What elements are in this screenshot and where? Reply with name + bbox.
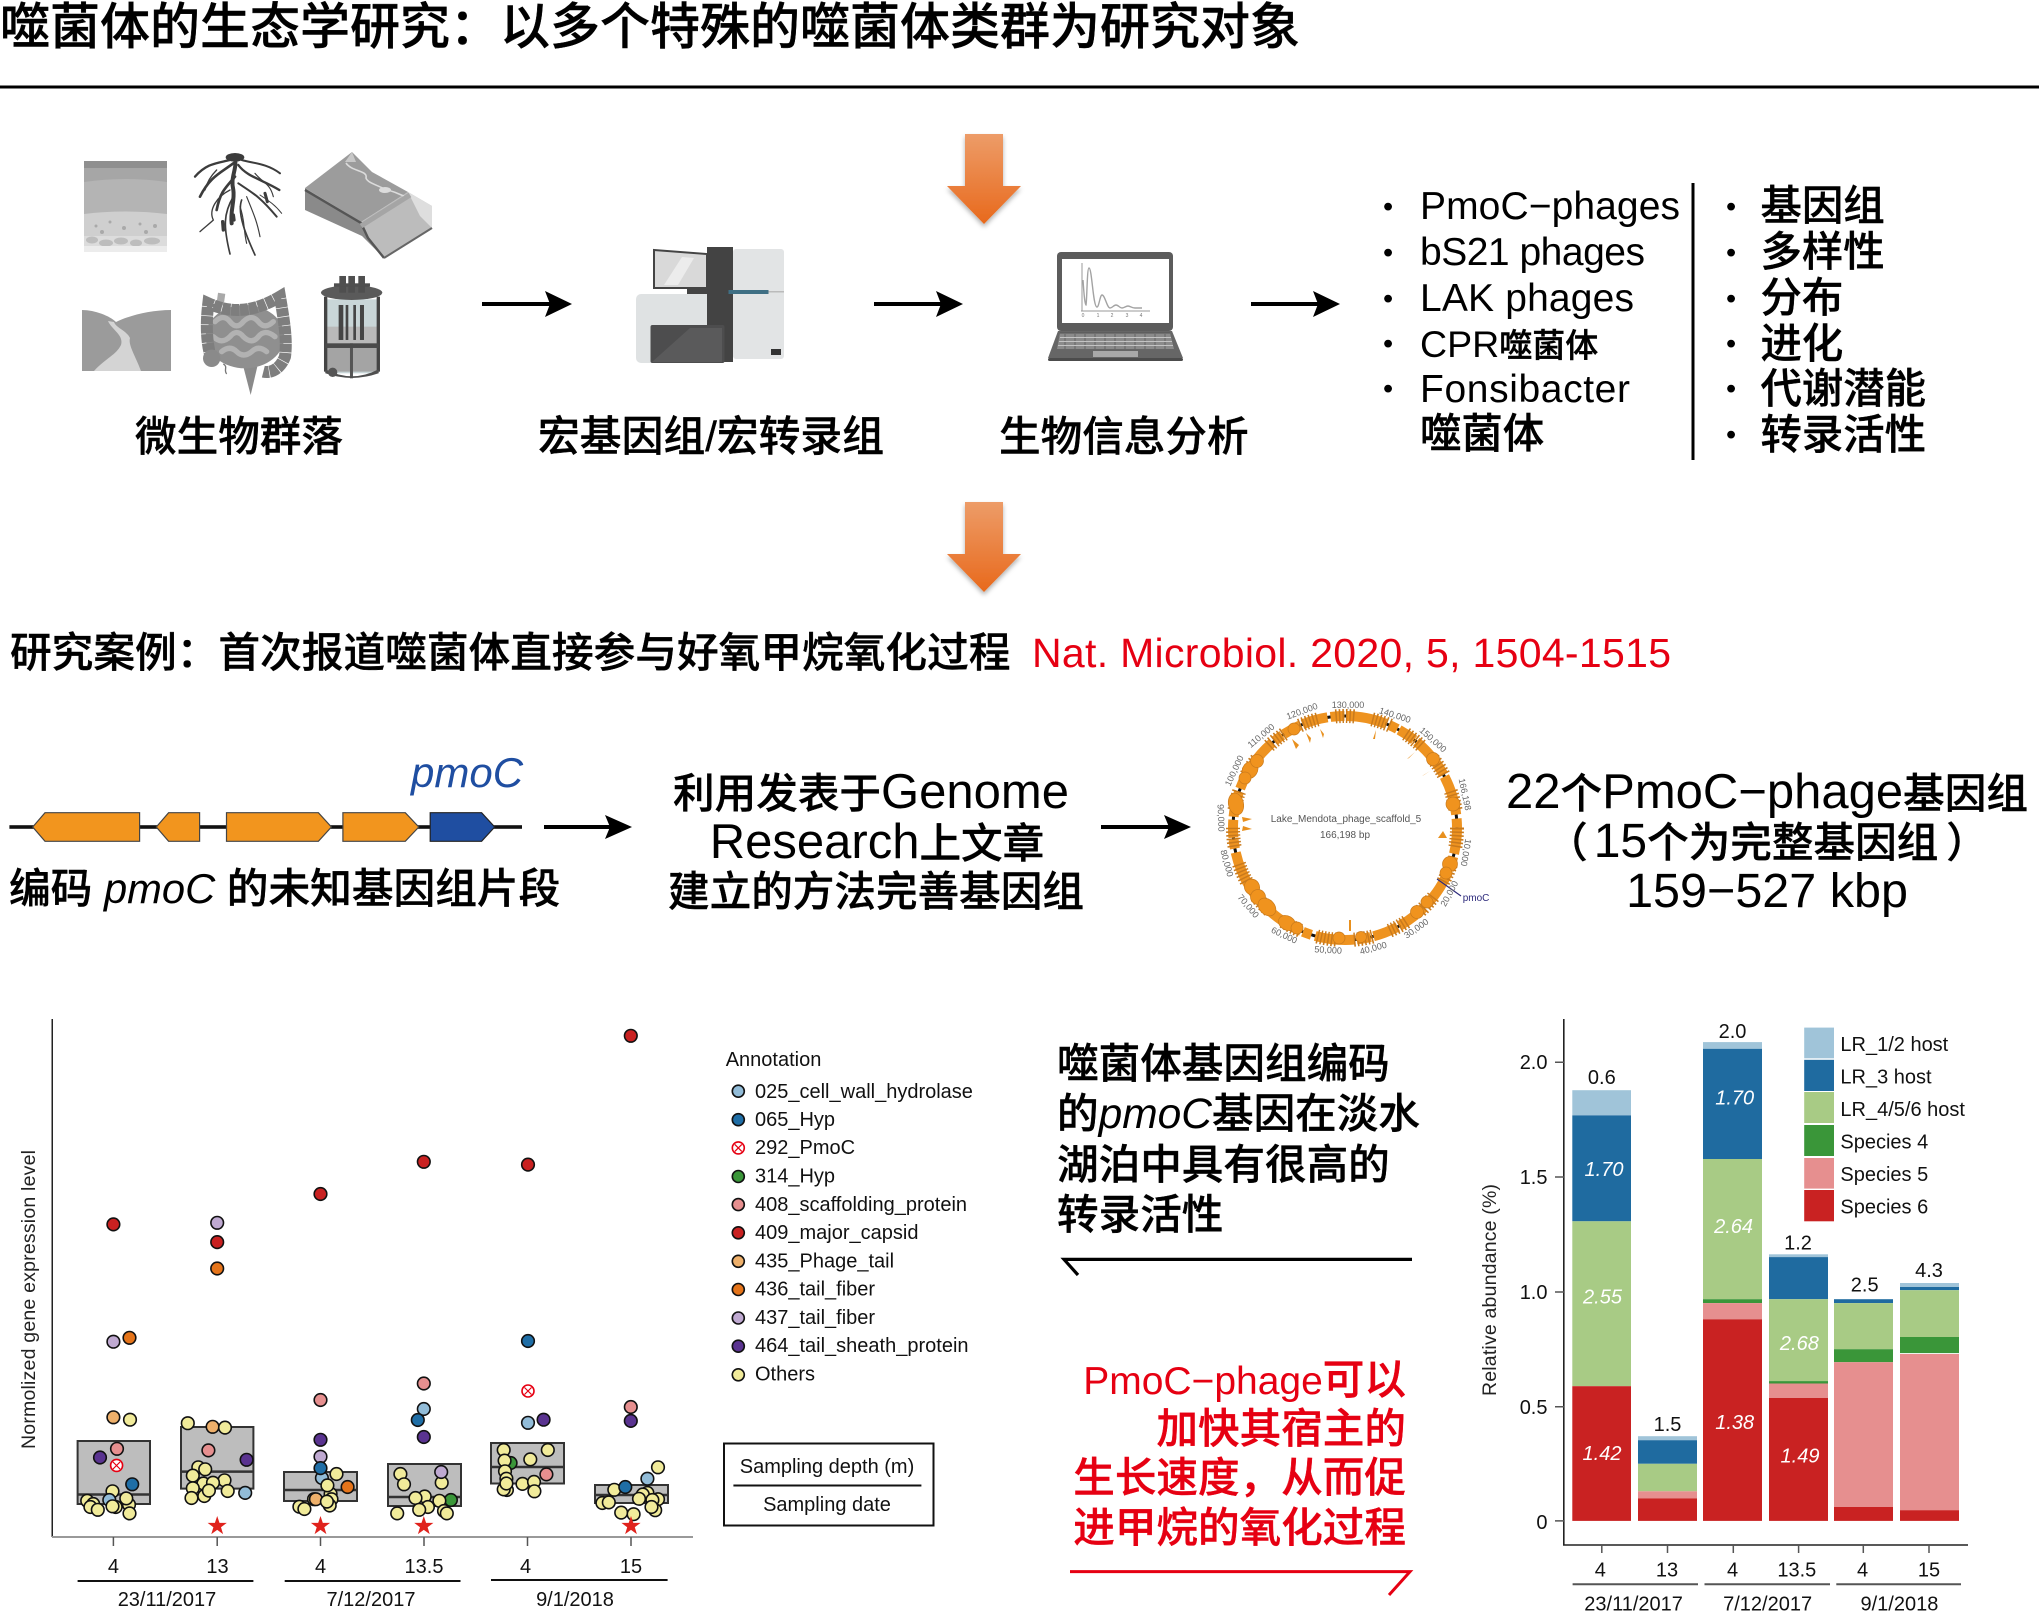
callout: growth effect: 加快其宿主的: [1156, 1405, 1406, 1452]
bar 3: [1703, 1042, 1762, 1521]
arrow: black left: [1064, 1259, 1412, 1275]
bar 1: [1572, 1090, 1631, 1521]
legend: annotation: 025_cell_wall_hydrolase: [755, 1081, 973, 1103]
caption: metagenome: 宏基因组/宏转录组: [538, 413, 884, 460]
list: study aspects: •: [1726, 419, 1736, 451]
callout: transcription activity: 的pmoC基因在淡水: [1057, 1090, 1420, 1138]
genome map labels: 40,000: [1359, 940, 1388, 956]
genome map labels: 100,000: [1223, 754, 1246, 788]
genome map labels: pmoC: [1463, 893, 1489, 904]
genome map labels: 80,000: [1219, 849, 1235, 878]
genome map labels: 150,000: [1418, 725, 1448, 754]
arrow: to sequencing: [482, 291, 572, 317]
data points: 13 m, 23/11/2017: [182, 1216, 253, 1504]
legend: hosts: Species 6: [1840, 1196, 1928, 1218]
genome map labels: 50,000: [1314, 944, 1342, 956]
icon: laptop: 2: [1111, 313, 1114, 319]
data points: 4 m, 23/11/2017: [81, 1218, 138, 1520]
list: study aspects: •: [1726, 373, 1736, 405]
text: PmoC-phage genomes: [1506, 765, 2028, 918]
y tick labels: 1.0: [1520, 1282, 1548, 1304]
x axis labels: 13: [1656, 1560, 1678, 1582]
x axis labels: 4: [1595, 1560, 1606, 1582]
arrow: fragment to method: [544, 815, 632, 839]
list: phage groups: •: [1383, 373, 1393, 405]
genome map labels: 30,000: [1402, 917, 1430, 941]
x axis labels: 15: [1918, 1560, 1940, 1582]
bar top labels: [1588, 1021, 1943, 1436]
y tick labels: 0: [1536, 1512, 1548, 1534]
genome map labels: 130,000: [1332, 700, 1364, 710]
legend: annotation: 408_scaffolding_protein: [755, 1194, 967, 1216]
title: 噬菌体的生态学研究：以多个特殊的噬菌体类群为研究对象: [0, 0, 1300, 55]
bar 6: [1900, 1283, 1959, 1521]
y tick labels: [1520, 1052, 1548, 1534]
text: method: [668, 765, 1084, 915]
axes: [1555, 1019, 1968, 1553]
chart: relative abundance: [1479, 1019, 1968, 1616]
legend: annotation: Others: [755, 1364, 815, 1386]
x axis labels: 15: [620, 1556, 642, 1578]
legend: hosts: [1804, 1028, 1965, 1221]
list: study aspects: 代谢潜能: [1760, 366, 1926, 412]
icon: river valley: [82, 310, 171, 371]
list: phage groups: Fonsibacter: [1420, 368, 1630, 411]
list: phage groups: CPR噬菌体: [1420, 323, 1598, 365]
arrow: to bioinformatics: [874, 291, 963, 317]
legend: annotation: 437_tail_fiber: [755, 1307, 875, 1329]
bar value labels: 2.55: [1582, 1286, 1623, 1308]
legend: annotation: 314_Hyp: [755, 1166, 835, 1188]
legend: annotation: [726, 1049, 973, 1386]
x axis labels: 4: [108, 1556, 119, 1578]
bar 5: [1834, 1299, 1893, 1521]
bar value labels: 1.70: [1585, 1159, 1623, 1181]
list: phage groups: bS21 phages: [1420, 231, 1645, 274]
bar 4: [1769, 1254, 1828, 1521]
callout: growth effect: PmoC−phage可以: [1083, 1356, 1406, 1403]
icon: bioreactor: [321, 276, 382, 378]
genome map labels: Lake_Mendota_phage_scaffold_5: [1271, 814, 1422, 825]
y tick labels: 1.5: [1520, 1167, 1548, 1189]
caption: bioinformatics: 生物信息分析: [999, 413, 1249, 460]
text: PmoC-phage genomes: 159−527 kbp: [1626, 864, 1908, 918]
genome map labels: 120,000: [1285, 701, 1319, 721]
list: phage groups: •: [1383, 328, 1393, 360]
legend: sampling key: Sampling date: [763, 1494, 891, 1516]
list: study aspects: •: [1726, 237, 1736, 269]
icon: laptop: 4: [1140, 313, 1143, 319]
bar value labels: 1.70: [1715, 1088, 1754, 1110]
x axis labels: 13.5: [1777, 1560, 1816, 1582]
icon: sequencer: [636, 247, 784, 363]
genome map labels: 166,198 bp: [1320, 830, 1370, 841]
icon: laptop: [1048, 252, 1183, 361]
genome map labels: 140,000: [1378, 705, 1412, 725]
x axis labels: 7/12/2017: [327, 1589, 415, 1611]
panel: microbial communities icons: [82, 152, 432, 395]
list: phage groups: [1383, 185, 1680, 457]
heading: case study: 研究案例：首次报道噬菌体直接参与好氧甲烷氧化过程: [10, 629, 1010, 676]
x axis labels: 23/11/2017: [1584, 1594, 1683, 1616]
circular genome map: [1216, 700, 1489, 956]
list: phage groups: PmoC−phages: [1420, 185, 1680, 228]
legend: sampling key: Sampling depth (m): [740, 1456, 914, 1478]
icon: landscape block: [305, 152, 432, 258]
x axis labels: 13.5: [405, 1556, 443, 1578]
genome map labels: 110,000: [1246, 722, 1276, 750]
bar value labels: 2.68: [1779, 1333, 1819, 1355]
list: phage groups: 噬菌体: [1420, 411, 1544, 457]
legend: annotation: 409_major_capsid: [755, 1222, 918, 1244]
genome map labels: 70,000: [1236, 892, 1261, 920]
x axis labels: 4: [520, 1556, 531, 1578]
text: PmoC-phage genomes: 22个PmoC−phage基因组: [1506, 765, 2028, 819]
bar top labels: 2.0: [1719, 1021, 1746, 1043]
icon: intestine: [203, 293, 286, 395]
label: pmoC: pmoC: [409, 749, 524, 796]
x axis labels: 7/12/2017: [1723, 1594, 1812, 1616]
significance stars: [208, 1516, 641, 1534]
bar value labels: 1.49: [1781, 1446, 1819, 1468]
text: method: Research上文章: [710, 815, 1044, 869]
list: study aspects: •: [1726, 328, 1736, 360]
legend: annotation: 464_tail_sheath_protein: [755, 1335, 969, 1357]
legend: hosts: Species 5: [1840, 1164, 1928, 1186]
bar top labels: 0.6: [1588, 1067, 1616, 1089]
axes: [52, 1019, 693, 1546]
data points: 13.5 m, 7/12/2017: [391, 1156, 457, 1520]
x axis labels: [78, 1556, 668, 1611]
x axis labels: 9/1/2018: [1860, 1594, 1938, 1616]
arrow: method to genome map: [1101, 815, 1191, 839]
list: study aspects: 进化: [1760, 321, 1843, 367]
bar top labels: 2.5: [1851, 1274, 1879, 1296]
bar value labels: 2.64: [1713, 1216, 1753, 1238]
x axis labels: 4: [315, 1556, 326, 1578]
icon: laptop: 0: [1082, 313, 1085, 319]
icon: plant roots: [195, 153, 282, 255]
callout: growth effect: 生长速度，从而促: [1073, 1454, 1406, 1501]
data points: 15 m, 9/1/2018: [596, 1030, 664, 1520]
bar top labels: 4.3: [1915, 1260, 1943, 1282]
list: study aspects: •: [1726, 283, 1736, 315]
text: method: 建立的方法完善基因组: [668, 868, 1084, 915]
arrow: bottom orange: [947, 502, 1021, 592]
list: study aspects: 基因组: [1760, 183, 1885, 229]
boxplots: [78, 1427, 668, 1506]
genome map labels: 20,000: [1438, 879, 1460, 908]
legend: hosts: LR_1/2 host: [1840, 1034, 1949, 1056]
bar top labels: 1.5: [1654, 1414, 1681, 1436]
text: method: 利用发表于Genome: [673, 765, 1069, 819]
chart: gene expression: [18, 1019, 693, 1611]
genome map labels: 10,000: [1459, 838, 1473, 867]
genome map labels: 60,000: [1270, 925, 1299, 946]
data points: 4 m, 9/1/2018: [497, 1158, 554, 1498]
icon: laptop: 1: [1097, 313, 1100, 319]
y tick labels: 0.5: [1520, 1397, 1548, 1419]
list: phage groups: LAK phages: [1420, 277, 1634, 320]
y axis label: Relative abundance (%): [1479, 1184, 1501, 1396]
x axis labels: [1573, 1560, 1961, 1616]
caption: unknown fragment: 编码 pmoC 的未知基因组片段: [9, 865, 560, 912]
x axis labels: 4: [1857, 1560, 1868, 1582]
arrow: top orange: [947, 134, 1021, 224]
citation: Nat. Microbiol. 2020, 5, 1504-1515: [1032, 630, 1671, 676]
bar value labels: [1582, 1088, 1819, 1468]
icon: soil profile: [84, 161, 167, 252]
y tick labels: 2.0: [1520, 1052, 1548, 1074]
arrow: to phage lists: [1251, 291, 1340, 317]
legend: annotation: 292_PmoC: [755, 1137, 855, 1159]
bar value labels: 1.38: [1715, 1412, 1754, 1434]
callout: transcription activity: 噬菌体基因组编码: [1057, 1040, 1390, 1087]
genome map labels: 166,198: [1457, 777, 1473, 811]
legend: annotation: 436_tail_fiber: [755, 1278, 875, 1300]
bar value labels: 1.42: [1583, 1443, 1621, 1465]
x axis labels: 9/1/2018: [536, 1589, 614, 1611]
list: study aspects: 转录活性: [1760, 412, 1926, 458]
x axis labels: 23/11/2017: [118, 1589, 216, 1611]
legend: annotation: Annotation: [726, 1049, 821, 1071]
list: phage groups: •: [1383, 191, 1393, 223]
callout: transcription activity: [1057, 1040, 1420, 1238]
list: study aspects: 分布: [1760, 275, 1843, 321]
arrow: red right: [1070, 1572, 1410, 1595]
callout: growth effect: 进甲烷的氧化过程: [1073, 1504, 1406, 1551]
data points: 4 m, 7/12/2017: [293, 1188, 354, 1515]
x axis labels: 4: [1727, 1560, 1738, 1582]
bar 2: [1638, 1436, 1697, 1521]
icon: laptop: 3: [1126, 313, 1129, 319]
legend: sampling key: [724, 1444, 934, 1526]
text: PmoC-phage genomes: （15个为完整基因组）: [1546, 815, 1988, 868]
callout: transcription activity: 转录活性: [1057, 1191, 1223, 1238]
x axis labels: 13: [206, 1556, 229, 1578]
gene map: [9, 813, 522, 841]
legend: annotation: 065_Hyp: [755, 1109, 835, 1131]
genome map labels: 90,000: [1216, 804, 1226, 832]
legend: hosts: LR_3 host: [1840, 1066, 1932, 1088]
caption: microbial community: 微生物群落: [135, 413, 343, 460]
genome map labels: [1216, 700, 1489, 956]
list: phage groups: •: [1383, 283, 1393, 315]
callout: growth effect: [1073, 1356, 1406, 1551]
legend: hosts: LR_4/5/6 host: [1840, 1099, 1965, 1121]
stacked bars: [1572, 1042, 1959, 1521]
legend: hosts: Species 4: [1840, 1132, 1928, 1154]
callout: transcription activity: 湖泊中具有很高的: [1057, 1141, 1390, 1188]
list: phage groups: •: [1383, 237, 1393, 269]
list: study aspects: •: [1726, 191, 1736, 223]
list: study aspects: [1726, 183, 1926, 458]
bar top labels: 1.2: [1784, 1232, 1812, 1254]
y axis label: Normolized gene expression level: [18, 1150, 40, 1449]
legend: annotation: 435_Phage_tail: [755, 1250, 894, 1272]
list: study aspects: 多样性: [1760, 229, 1885, 275]
